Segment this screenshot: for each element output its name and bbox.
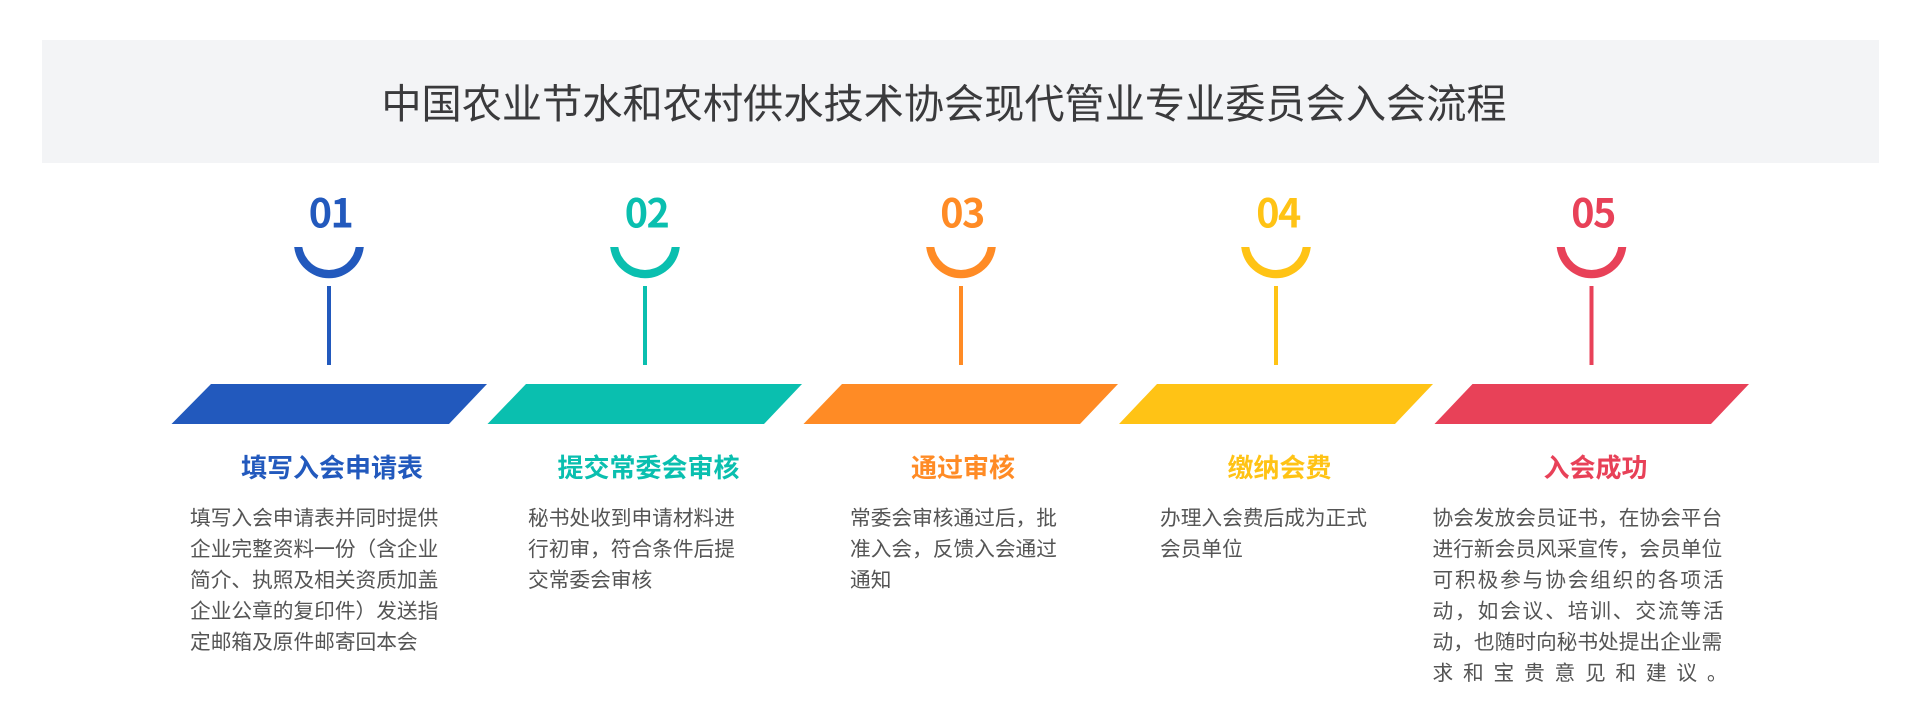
description 01: 企业公章的复印件）发送指 <box>190 600 438 623</box>
panel: step 05 <box>1432 182 1749 685</box>
heading 04: 缴纳会费 <box>1227 453 1332 483</box>
number 02: 02 <box>625 182 668 240</box>
description 03: 通知 <box>850 569 891 592</box>
icon: arc 03 <box>926 247 996 278</box>
description 02: 交常委会审核 <box>528 569 652 592</box>
description 04: 会员单位 <box>1160 538 1243 561</box>
connector line 05 <box>1590 286 1594 365</box>
connector line 01 <box>327 286 331 365</box>
icon: arc 04 <box>1241 247 1311 278</box>
icon: arc 02 <box>610 247 680 278</box>
description 02: 行初审，符合条件后提 <box>528 538 735 561</box>
description 01: 填写入会申请表并同时提供 <box>190 507 438 530</box>
description 05: 协会发放会员证书，在协会平台 <box>1432 507 1722 530</box>
description 05: 求和宝贵意见和建议。 <box>1432 662 1737 685</box>
description 05 <box>1432 507 1737 685</box>
description 02: 秘书处收到申请材料进 <box>528 507 735 530</box>
description 05: 进行新会员风采宣传，会员单位 <box>1432 538 1722 561</box>
icon: arc 01 <box>294 247 364 278</box>
description 03: 准入会，反馈入会通过 <box>850 538 1057 561</box>
heading 02: 提交常委会审核 <box>557 453 740 483</box>
heading 03: 通过审核 <box>911 453 1015 483</box>
description 03 <box>850 507 1057 592</box>
number 05: 05 <box>1571 182 1615 240</box>
parallelogram bar 01 <box>172 384 487 424</box>
title: 中国农业节水和农村供水技术协会现代管业专业委员会入会流程 <box>381 82 1507 127</box>
description 02 <box>528 507 735 592</box>
description 01: 企业完整资料一份（含企业 <box>190 538 438 561</box>
parallelogram bar 02 <box>488 384 802 424</box>
icon: arc 05 <box>1557 247 1626 278</box>
connector line 02 <box>643 286 647 365</box>
description 01 <box>190 507 438 654</box>
description 01: 简介、执照及相关资质加盖 <box>190 569 438 592</box>
heading 01: 填写入会申请表 <box>241 453 423 483</box>
parallelogram bar 04 <box>1119 384 1433 424</box>
connector line 03 <box>959 286 963 365</box>
description 01: 定邮箱及原件邮寄回本会 <box>190 631 418 654</box>
header band with title <box>42 40 1879 163</box>
heading 05: 入会成功 <box>1543 453 1648 483</box>
description 05: 动，也随时向秘书处提出企业需 <box>1432 631 1722 654</box>
description 04: 办理入会费后成为正式 <box>1160 507 1367 530</box>
connector line 04 <box>1274 286 1278 365</box>
description 03: 常委会审核通过后，批 <box>850 507 1057 530</box>
description 05: 动，如会议、培训、交流等活 <box>1432 600 1726 623</box>
number 01: 01 <box>309 182 352 240</box>
parallelogram bar 05 <box>1434 384 1749 424</box>
number 03: 03 <box>940 182 984 240</box>
panel: step 02 <box>488 182 802 592</box>
panel: step 01 <box>172 182 487 654</box>
description 04 <box>1160 507 1367 561</box>
panel: step 03 <box>804 182 1118 592</box>
description 05: 可积极参与协会组织的各项活 <box>1432 569 1726 592</box>
panel: step 04 <box>1119 182 1433 561</box>
parallelogram bar 03 <box>804 384 1118 424</box>
number 04: 04 <box>1256 182 1301 240</box>
